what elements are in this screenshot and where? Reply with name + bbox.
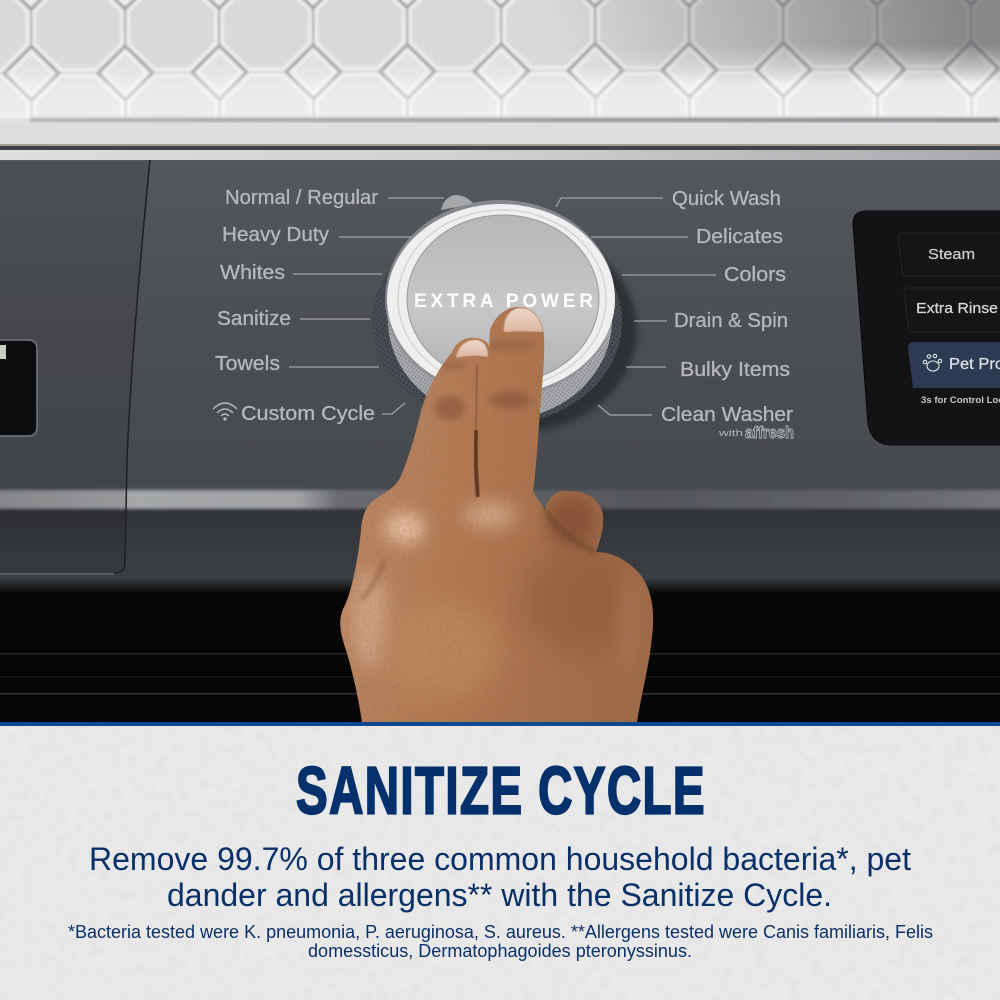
- leader lines from labels to dial: [289, 198, 716, 415]
- accent rule: [0, 722, 1000, 726]
- washer control panel: [0, 160, 1000, 722]
- cycle labels: right: Colors: [724, 264, 786, 286]
- footnote: *Bacteria tested were K. pneumonia, P. aeruginosa, S. aureus. **Allergens tested were Canis familiaris, Felis: [68, 922, 933, 942]
- cycle labels: right: Delicates: [696, 226, 783, 248]
- dial chrome skirt: [388, 220, 612, 420]
- fingernail: index: [456, 340, 488, 358]
- cycle labels: left: Custom Cycle: [241, 403, 375, 425]
- button: pet pro: Pet Pro: [949, 356, 1000, 373]
- cycle labels: left: [215, 187, 378, 425]
- footnote: domessticus, Dermatophagoides pteronyssinus.: [308, 941, 692, 961]
- cycle labels: right: Quick Wash: [672, 188, 781, 210]
- caption panel: [0, 722, 1000, 1000]
- icon: paw: [923, 354, 942, 371]
- left lid panel with seam: [0, 160, 150, 574]
- cycle labels: left: Heavy Duty: [222, 224, 329, 246]
- hand pressing dial: [335, 300, 660, 725]
- dial text: EXTRA POWER: [414, 291, 593, 312]
- dial white ring: [387, 204, 615, 394]
- cycle labels: right: Bulky Items: [680, 359, 790, 381]
- icon: wifi: [213, 403, 237, 420]
- left display window: [0, 340, 37, 436]
- selector bump: [441, 195, 474, 210]
- with affresh logo: affresh: [745, 423, 794, 442]
- button: extra rinse: Extra Rinse: [916, 300, 998, 317]
- cycle labels: left: Normal / Regular: [225, 187, 378, 209]
- with affresh logo: with: [718, 428, 743, 439]
- washer top trim: [0, 144, 1000, 160]
- dial knurled base: [372, 219, 622, 425]
- description: dander and allergens** with the Sanitize Cycle.: [167, 877, 832, 913]
- button: pet pro: [908, 342, 1000, 388]
- with affresh logo: [718, 423, 794, 442]
- cycle labels: left: Sanitize: [217, 308, 291, 330]
- fingernail: middle: [504, 308, 543, 332]
- dial face: [407, 215, 599, 383]
- cycle labels: right: Clean Washer: [661, 404, 793, 426]
- rotary cycle dial: [372, 195, 622, 425]
- description: [89, 841, 911, 913]
- background: tiled wall: [0, 0, 1000, 150]
- dial outer rim: [385, 200, 615, 398]
- description: Remove 99.7% of three common household bacteria*, pet: [89, 841, 911, 877]
- button: extra rinse: [904, 288, 1000, 332]
- digital option panel: [853, 211, 1000, 445]
- knob shadow: [393, 227, 637, 433]
- button: steam: Steam: [928, 246, 975, 263]
- footnote: [68, 922, 933, 961]
- cycle labels: right: Drain & Spin: [674, 310, 788, 332]
- button: steam: [898, 233, 1000, 276]
- cycle labels: right: [661, 188, 793, 426]
- cycle labels: left: Towels: [215, 353, 280, 375]
- title: SANITIZE CYCLE: [296, 754, 706, 828]
- cycle labels: left: Whites: [220, 262, 285, 284]
